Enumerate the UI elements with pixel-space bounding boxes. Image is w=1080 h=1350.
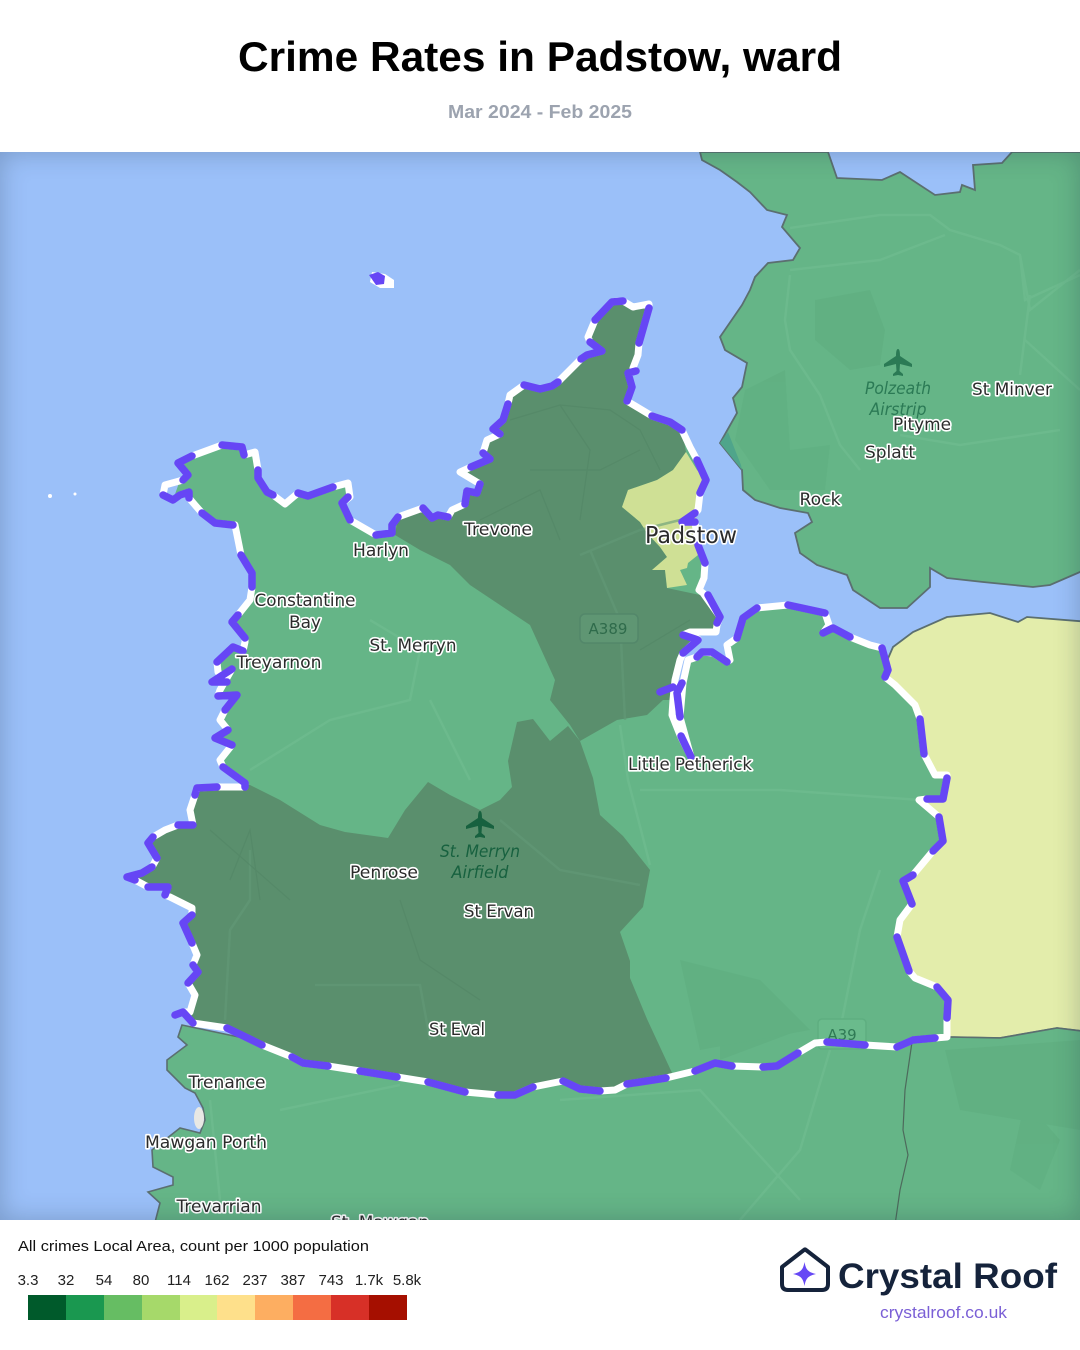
legend tick labels: 237 [242, 1272, 268, 1289]
place name labels: Little Petherick [628, 755, 752, 775]
place name labels: Trevarrian [176, 1197, 262, 1217]
crime area: darker south (St Eval) [135, 719, 673, 1095]
legend tick labels: 162 [204, 1272, 230, 1289]
place name labels: Treyarnon [235, 653, 322, 673]
legend tick labels: 387 [280, 1272, 306, 1289]
logo wordmark: Crystal Roof [838, 1257, 1057, 1296]
place name labels: St. Merryn [370, 636, 456, 656]
beach at Mawgan Porth [194, 1107, 204, 1129]
ward fill: green [175, 442, 944, 1059]
place name labels: Mawgan Porth [145, 1133, 267, 1153]
legend tick labels: 32 [58, 1272, 74, 1289]
airfield icon: St. Merryn [466, 811, 494, 838]
place name labels: Bay [289, 613, 321, 633]
legend tick labels: 80 [133, 1272, 149, 1289]
small island [48, 272, 394, 498]
place name labels: Padstow [645, 523, 737, 549]
legend tick labels: 114 [167, 1272, 191, 1289]
legend [18, 1238, 422, 1320]
airstrip icon: Polzeath [884, 349, 912, 376]
airfield label: St. Merryn Airfield: St. Merryn [440, 842, 520, 862]
place name labels: Penrose [350, 863, 418, 883]
ward boundary: purple dashes [127, 301, 948, 1095]
place name labels: St Eval [429, 1020, 485, 1040]
airstrip label: Polzeath Airstrip: Airstrip [869, 400, 927, 420]
place name labels: Trenance [187, 1073, 266, 1093]
ward boundary: white casing [127, 301, 948, 1095]
land: tidal area near Rock [720, 432, 742, 470]
road shield A389: A389 [589, 620, 627, 638]
road shield A389 [580, 614, 626, 644]
sea [0, 152, 1080, 1220]
place name labels: Rock [800, 490, 841, 510]
land: St Minver peninsula [700, 152, 1080, 608]
logo icon: house with star [782, 1250, 828, 1290]
airfield label: St. Merryn Airfield [440, 844, 519, 878]
place name labels: St Ervan [464, 902, 534, 922]
legend tick labels: 3.3 [18, 1272, 38, 1289]
place name labels [145, 380, 1052, 1233]
website link: crystalroof.co.uk [880, 1304, 1008, 1322]
road shield A39: A39 [827, 1026, 857, 1044]
crime area: Padstow town, lighter [622, 452, 706, 588]
legend colour scale [28, 1295, 407, 1320]
map edge shadow [0, 152, 1080, 1220]
legend tick labels: 1.7k [355, 1272, 384, 1289]
road shield A39 [828, 1018, 856, 1040]
airstrip label: Polzeath Airstrip [866, 381, 930, 418]
legend tick labels [18, 1272, 422, 1289]
airfield label: St. Merryn Airfield: Airfield [451, 863, 509, 883]
place name labels: Constantine [254, 591, 356, 611]
place name labels: St. Mawgan [331, 1213, 429, 1233]
legend tick labels: 54 [96, 1272, 112, 1289]
subtitle: date range: Mar 2024 - Feb 2025 [448, 102, 632, 122]
roads and woodland detail [210, 215, 1080, 1220]
land: south district [148, 1025, 1080, 1230]
place name labels: Harlyn [353, 541, 409, 561]
place name labels: St Minver [972, 380, 1052, 400]
crime area: darker central north (Padstow rural) [395, 301, 720, 741]
legend title: All crimes Local Area, count per 1000 population [18, 1238, 369, 1255]
place name labels: Pityme [893, 415, 951, 435]
district boundary line [895, 1042, 912, 1225]
airstrip label: Polzeath Airstrip: Polzeath [865, 379, 931, 399]
place name labels: Trevone [463, 520, 532, 540]
place name labels: Splatt [865, 443, 915, 463]
title: Crime Rates in Padstow, ward [238, 33, 842, 80]
legend tick labels: 5.8k [393, 1272, 422, 1289]
legend tick labels: 743 [318, 1272, 344, 1289]
land: yellow district south-east [880, 613, 1080, 1038]
